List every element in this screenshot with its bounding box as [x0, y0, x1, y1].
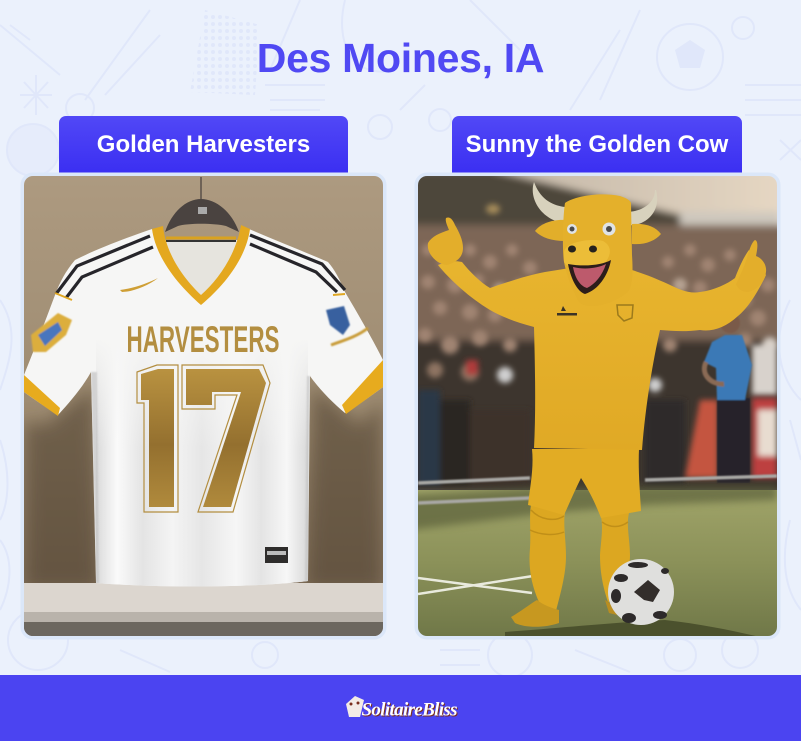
- hanger: [165, 177, 239, 232]
- tab: Golden Harvesters: Golden Harvesters: [97, 131, 310, 158]
- panel: mascot image: [414, 172, 780, 640]
- sleeve crests: [31, 306, 368, 352]
- crowd: [418, 204, 778, 485]
- shelf: [24, 583, 383, 636]
- mascot hands: [428, 217, 463, 265]
- grass: [418, 490, 777, 636]
- mascot shirt: [438, 250, 766, 450]
- panel: jersey image: [20, 172, 386, 640]
- mascot shirt logos: [557, 305, 633, 321]
- red banner: [685, 398, 777, 478]
- soccer ball: [608, 559, 674, 625]
- mascot horns: [533, 182, 566, 223]
- sleeve trims: [55, 293, 345, 300]
- background player: [704, 313, 752, 483]
- jersey tag: [265, 547, 288, 563]
- mascot boots: [511, 600, 559, 627]
- mascot nostrils: [568, 246, 576, 252]
- stadium backdrop: [410, 170, 785, 495]
- ground shadow: [505, 620, 760, 637]
- swoosh: [120, 278, 158, 292]
- tab: Sunny the Golden Cow: [452, 116, 742, 173]
- tab: Sunny the Golden Cow: Sunny the Golden Cow: [466, 131, 728, 158]
- title: Des Moines, IA: [257, 35, 544, 81]
- jersey shadow: [24, 385, 383, 590]
- sleeve cuffs: [24, 375, 60, 416]
- pitch lines: [418, 576, 533, 594]
- mascot shorts: [528, 449, 641, 518]
- mascot: [428, 182, 766, 627]
- mascot legs: [530, 505, 566, 612]
- mascot eyes: [567, 224, 577, 234]
- fence: [418, 476, 777, 503]
- jersey name: HARVESTERS: [126, 319, 280, 360]
- footer logo: SolitaireBliss: [362, 700, 458, 722]
- mascot head: [562, 194, 632, 270]
- jersey number: [137, 365, 270, 512]
- footer logo: SolitaireBliss: [362, 700, 458, 720]
- jersey body and sleeves: [24, 225, 383, 590]
- mascot ears: [535, 220, 566, 241]
- footer bar: [0, 675, 801, 741]
- jersey inner collar: [166, 240, 238, 295]
- shoulder stripes: [56, 235, 345, 298]
- tab: Golden Harvesters: [59, 116, 348, 173]
- jersey collar: [152, 225, 250, 305]
- mascot mouth: [568, 260, 611, 294]
